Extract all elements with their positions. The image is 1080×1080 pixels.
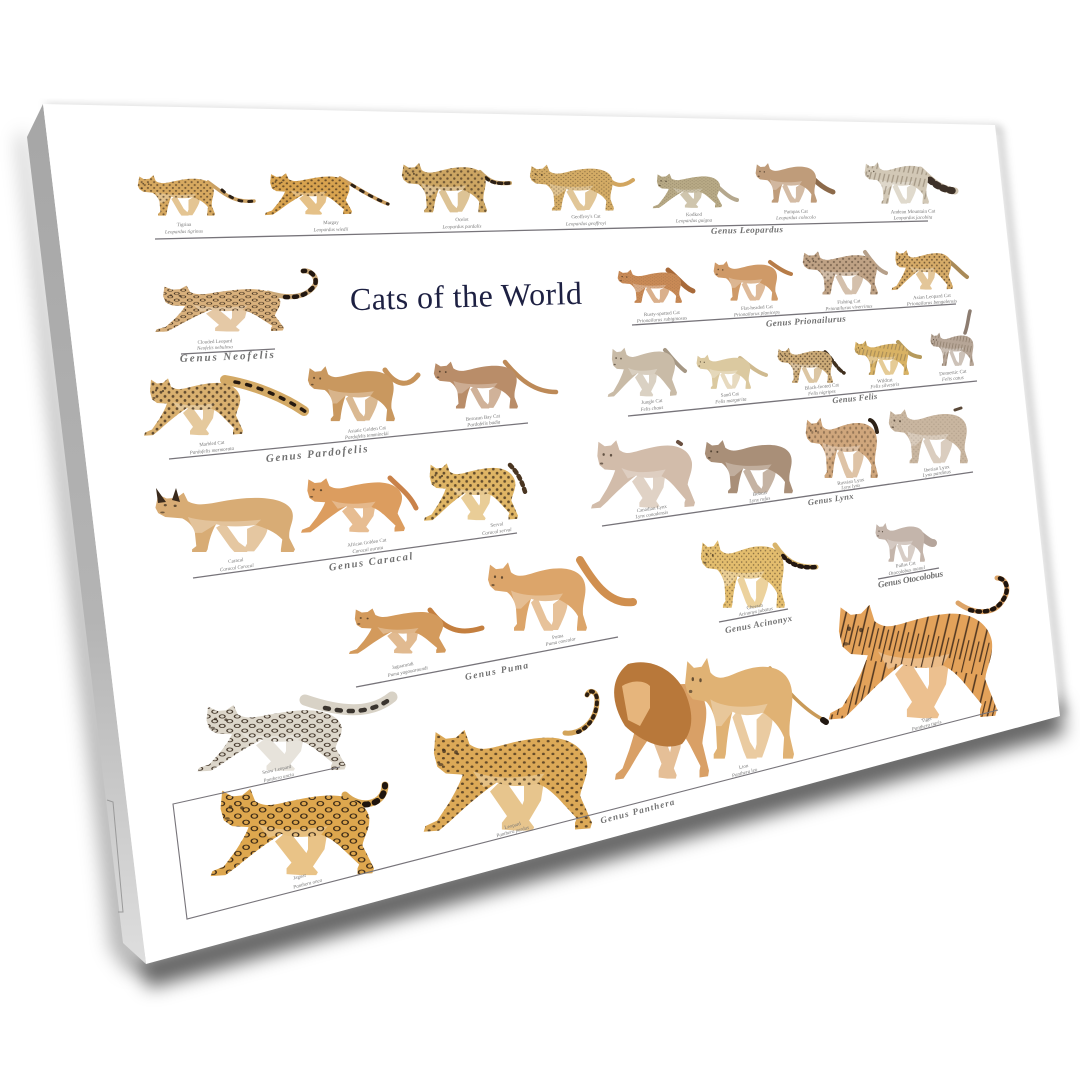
cat: Sand Cat: Felis margarita — [714, 397, 747, 406]
cat: Pampas Cat: Pampas Cat — [784, 210, 809, 215]
cat: Jaguarundi: Puma yagouaroundi — [386, 666, 429, 679]
cat: African Golden Cat — [301, 478, 416, 555]
cat: Tiger: Panthera tigris — [911, 720, 942, 733]
frame: Panthera box — [173, 710, 998, 919]
cat: Lioness — [685, 658, 826, 759]
panel: Genus Puma — [349, 560, 633, 687]
cat: Asiatic Golden Cat: Pardofelis temminckii — [344, 432, 390, 441]
cat: Tiger — [829, 578, 1007, 733]
cat: Snow Leopard: Snow Leopard — [262, 765, 292, 776]
cat: Cheetah — [701, 540, 816, 618]
genus label: Prionailurus: Genus Prionailurus — [766, 313, 847, 329]
genus label: Acinonyx: Genus Acinonyx — [724, 613, 793, 635]
cat: Pallas Cat — [876, 523, 933, 577]
cat: Cheetah: Cheetah — [746, 603, 764, 611]
cat: Pampas Cat: Leopardus colocolo — [775, 216, 816, 221]
cat: Domestic Cat — [930, 311, 974, 383]
cat: Andean Mountain Cat — [865, 162, 955, 221]
cat: Flat-headed Cat — [714, 261, 791, 319]
panel: Genus Leopardus — [138, 162, 955, 239]
cat: Tigrina: Leopardus tigrinus — [164, 230, 203, 235]
cat: Jungle Cat: Jungle Cat — [641, 399, 663, 406]
panel: Genus Otocolobus — [876, 523, 944, 590]
cat: Lion: Lion — [739, 764, 750, 771]
panel: Genus Felis — [608, 311, 977, 416]
cat: Bobcat — [705, 440, 793, 505]
cat: Wildcat — [855, 341, 920, 391]
cat: Bornean Bay Cat: Bornean Bay Cat — [466, 414, 501, 423]
cat: Snow Leopard: Panthera uncia — [262, 773, 295, 784]
panel: Genus Panthera — [173, 578, 1007, 919]
cat: Margay: Leopardus wiedii — [313, 228, 349, 233]
cat: Jaguarundi: Jaguarundi — [392, 662, 415, 671]
cat: Jaguar: Jaguar — [293, 873, 307, 882]
cat: Caracal — [155, 488, 295, 573]
cat: Wildcat: Wildcat — [877, 378, 894, 385]
canvas shadow — [18, 104, 1068, 988]
cat: Bobcat: Bobcat — [753, 491, 768, 498]
cat: Asian Leopard Cat — [892, 250, 967, 308]
cat: Domestic Cat: Felis catus — [941, 376, 964, 383]
cat: Flat-headed Cat: Flat-headed Cat — [741, 305, 774, 312]
cat: Cheetah: Acinonyx jubatus — [737, 607, 773, 618]
cat: Kodkod: Leopardus guigna — [675, 219, 713, 224]
cat: Puma — [488, 560, 633, 648]
cat: Ocelot: Ocelot — [455, 218, 469, 223]
cat: Russian Lynx: Lynx lynx — [840, 484, 862, 492]
cat: Sand Cat — [697, 355, 766, 406]
genus label: Pardofelis: Genus Pardofelis — [265, 443, 368, 465]
cat: Jaguar — [211, 785, 385, 891]
cat: Canadian Lynx: Lynx canadensis — [634, 511, 669, 521]
cat: Kodkod — [653, 174, 737, 224]
genus label: Leopardus: Genus Leopardus — [711, 224, 784, 236]
cat: Tigrina — [138, 175, 254, 235]
panel: Genus Caracal — [155, 463, 526, 578]
cat: African Golden Cat: Caracal aurata — [352, 546, 384, 555]
cat: Serval: Caracal serval — [482, 528, 513, 537]
cat: Caracal: Caracal Caracal — [220, 564, 255, 573]
cat: Leopard: Panthera pardus — [495, 826, 530, 839]
cat: Marbled Cat: Pardofelis marmorata — [189, 447, 235, 456]
cat: Rusty-spotted Cat — [618, 270, 693, 325]
cat: Asian Leopard Cat: Prionailurus bengalensis — [906, 299, 957, 308]
cat: Rusty-spotted Cat: Rusty-spotted Cat — [644, 311, 681, 318]
panel: Genus Lynx — [591, 408, 973, 526]
cat: Marbled Cat: Marbled Cat — [199, 441, 225, 448]
cat: Canadian Lynx: Canadian Lynx — [637, 505, 668, 514]
genus label: Lynx: Genus Lynx — [807, 491, 855, 507]
cat: Puma: Puma — [552, 634, 565, 641]
cat: Andean Mountain Cat: Leopardus jacobita — [893, 216, 933, 221]
cat: Snow Leopard — [198, 697, 393, 784]
cat: Iberian Lynx: Lynx pardinus — [922, 470, 951, 479]
genus label: Panthera: Genus Panthera — [599, 797, 676, 825]
cat: Ocelot — [402, 163, 510, 230]
cat: Asiatic Golden Cat — [308, 366, 418, 441]
cat: Jaguar: Panthera onca — [292, 878, 323, 891]
panel: Genus Pardofelis — [144, 362, 556, 465]
cat: Geoffroy's Cat — [530, 165, 633, 227]
cat: Jungle Cat — [608, 348, 685, 413]
cat: Pampas Cat — [756, 163, 833, 221]
cat: Lion: Panthera leo — [731, 768, 759, 779]
cat: Clouded Leopard: Neofelis nebulosa — [196, 345, 233, 352]
genus label: Puma: Genus Puma — [464, 661, 529, 683]
cat: Black-footed Cat — [778, 348, 844, 397]
cat: Wildcat: Felis silvestris — [869, 383, 900, 391]
genus label: Neofelis: Genus Neofelis — [180, 349, 274, 365]
cat: Serval — [424, 463, 526, 537]
cat: Puma: Puma concolor — [544, 637, 576, 648]
title: Cats of the World — [349, 275, 582, 317]
cat: Sand Cat: Sand Cat — [721, 392, 740, 399]
cat: Tiger: Tiger — [921, 717, 933, 724]
cat: Black-footed Cat: Black-footed Cat — [805, 383, 840, 392]
cat: Margay — [265, 173, 388, 233]
cat: Lion — [614, 662, 759, 780]
cat: Fishing Cat: Fishing Cat — [837, 299, 861, 306]
canvas side edge — [27, 104, 146, 964]
cat: Andean Mountain Cat: Andean Mountain Cat — [891, 209, 936, 216]
cat: Jungle Cat: Felis chaus — [639, 406, 664, 413]
cat: Russian Lynx: Russian Lynx — [837, 478, 865, 487]
cat: Caracal: Caracal — [228, 558, 244, 565]
cat: Iberian Lynx — [889, 408, 968, 479]
panel: Genus Acinonyx — [701, 540, 816, 635]
cat: Geoffroy's Cat: Leopardus geoffroyi — [565, 222, 607, 227]
cat: Leopard — [424, 691, 597, 839]
genus label: Otocolobus: Genus Otocolobus — [877, 568, 944, 590]
cat: Fishing Cat: Prionailurus viverrinus — [824, 304, 873, 313]
cat: Domestic Cat: Domestic Cat — [939, 370, 967, 377]
cat: Margay: Margay — [323, 221, 339, 226]
cat: Ocelot: Leopardus pardalis — [441, 225, 482, 230]
cat: Tigrina: Tigrina — [177, 223, 192, 228]
cat: Geoffroy's Cat: Geoffroy's Cat — [571, 215, 601, 220]
cat: Bobcat: Lynx rufus — [748, 497, 771, 505]
cat: African Golden Cat: African Golden Cat — [347, 538, 387, 549]
cat: Fishing Cat — [803, 251, 886, 313]
panel: Genus Neofelis — [155, 271, 316, 365]
genus label: Caracal: Genus Caracal — [328, 551, 413, 574]
cat: Russian Lynx — [806, 418, 878, 492]
cat: Flat-headed Cat: Prionailurus planiceps — [733, 311, 780, 319]
panel: Genus Prionailurus — [618, 250, 967, 329]
cat: Asiatic Golden Cat: Asiatic Golden Cat — [348, 426, 387, 435]
cat: Leopard: Leopard — [504, 822, 522, 831]
cat: Bornean Bay Cat — [434, 362, 556, 429]
genus label: Felis: Genus Felis — [832, 391, 878, 405]
cat: Black-footed Cat: Felis nigripes — [807, 390, 836, 397]
cat: Bornean Bay Cat: Pardofelis badia — [466, 420, 501, 429]
cat: Rusty-spotted Cat: Prionailurus rubiginosus — [636, 316, 687, 325]
cat: Kodkod: Kodkod — [686, 213, 703, 218]
canvas front face — [43, 104, 1060, 964]
cat: Clouded Leopard: Clouded Leopard — [197, 339, 233, 346]
cat: Pallas Cat: Otocolobus manul — [888, 566, 926, 577]
cat: Canadian Lynx — [591, 440, 695, 521]
cat: Serval: Serval — [490, 522, 504, 529]
cat: Marbled Cat — [144, 378, 306, 456]
cat: Pallas Cat: Pallas Cat — [896, 561, 917, 570]
cat: Clouded Leopard — [155, 271, 316, 352]
cat: Jaguarundi — [349, 608, 482, 679]
cat: Iberian Lynx: Iberian Lynx — [924, 465, 950, 474]
cat: Asian Leopard Cat: Asian Leopard Cat — [913, 294, 952, 301]
